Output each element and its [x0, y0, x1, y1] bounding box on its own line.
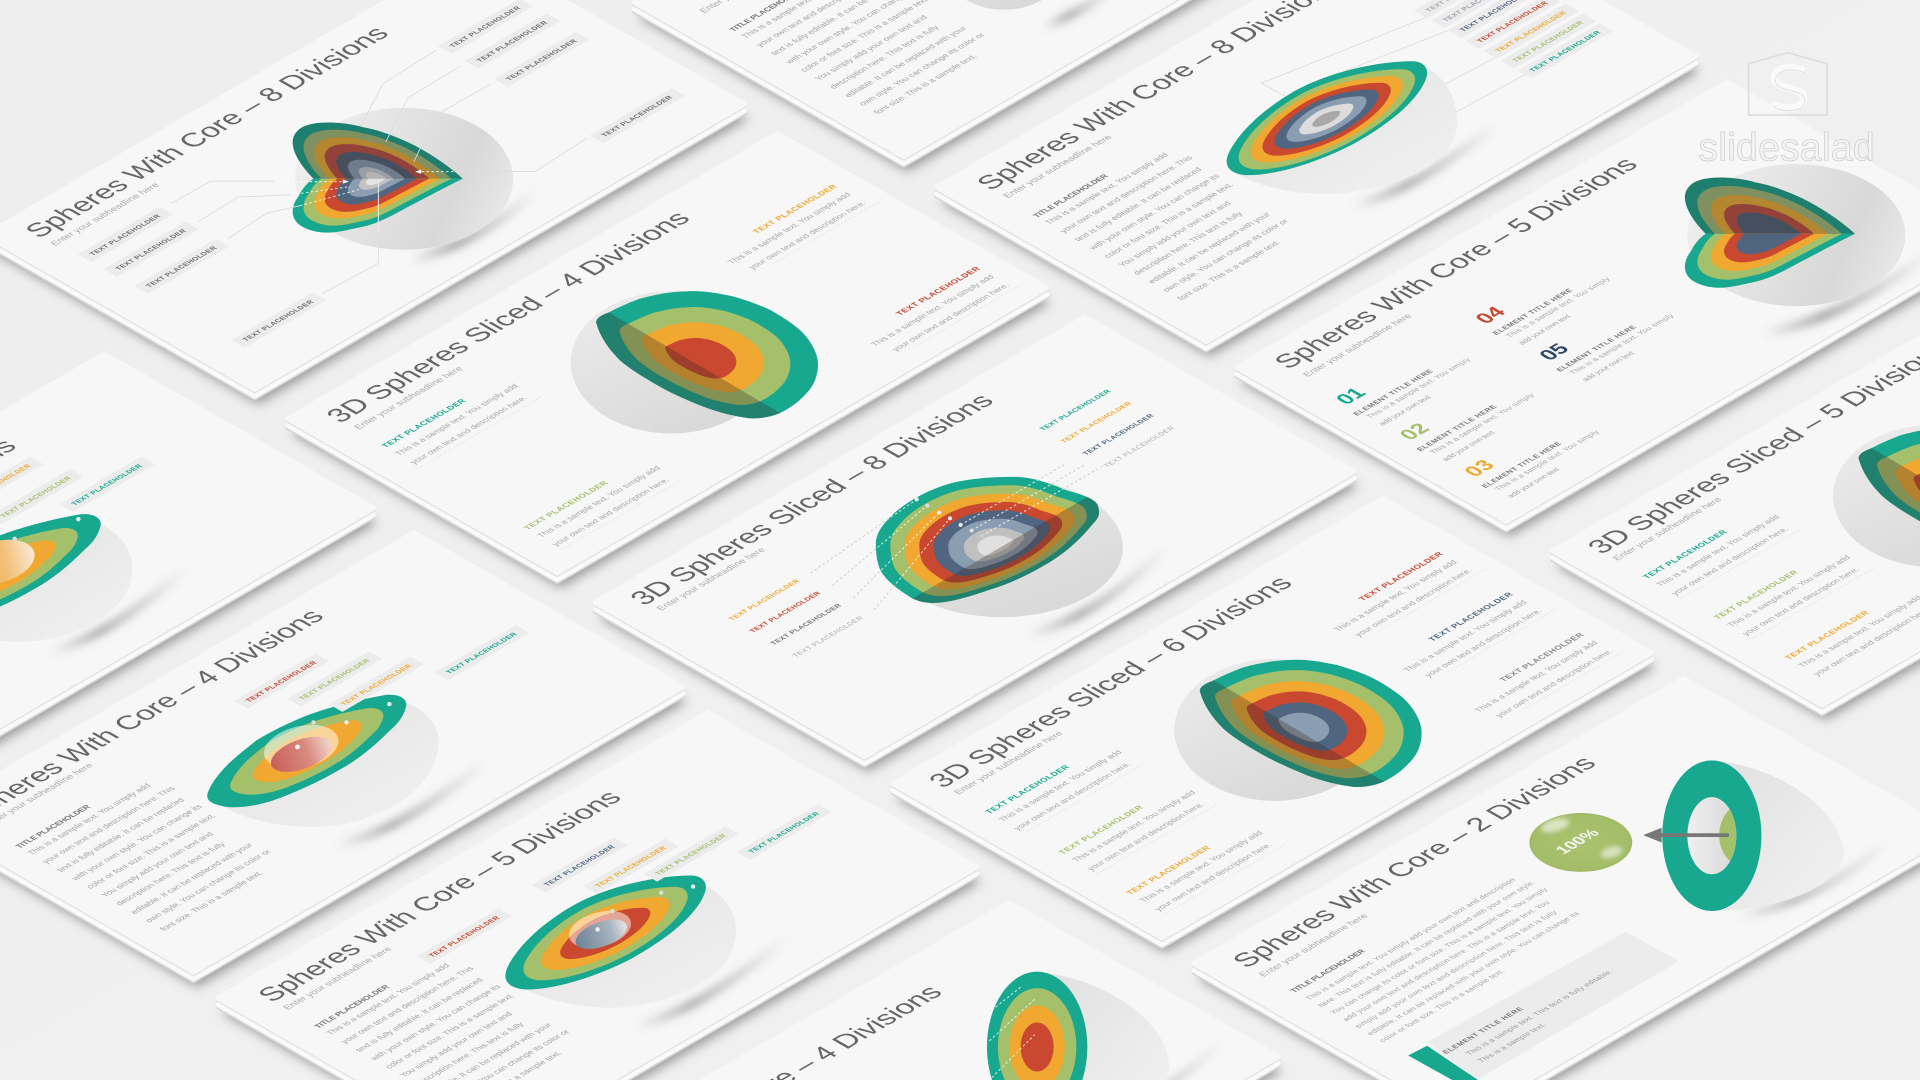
body text: text is fully editable. It can be replaced: [54, 796, 187, 873]
glass core: [565, 884, 695, 955]
subheading: Enter your subheadline here: [48, 181, 161, 247]
label: lime block: TEXT PLACEHOLDER: [1057, 804, 1145, 856]
title: Spheres With Core – 2 Divisions: [1225, 752, 1603, 972]
panel: spheres with core 2 divisions: [1192, 758, 1920, 1080]
half sphere: [507, 884, 736, 1008]
item 03: add your own text: [1505, 466, 1562, 499]
label: lime block: [1057, 780, 1219, 874]
body text: color or font size. This is a sample text.: [382, 992, 517, 1070]
disc rings: [0, 514, 101, 627]
disc rings with dark slice: [1200, 660, 1422, 787]
item 03: ELEMENT TITLE HERE: [1479, 440, 1564, 489]
glass core: [260, 702, 392, 779]
sphere shadow: [50, 566, 190, 651]
body text: your own text and description here. This: [39, 785, 177, 865]
item 04: 04: [1471, 304, 1511, 327]
item 03: 03: [1460, 457, 1500, 480]
sphere body: [1174, 659, 1375, 801]
labels: TEXT PLACEHOLDER: [1476, 1, 1550, 44]
panel: spheres with core 8 divisions, flat disc: [937, 0, 1700, 356]
label: red block: TEXT PLACEHOLDER: [894, 265, 982, 317]
labels: TEXT PLACEHOLDER: [476, 20, 550, 63]
subheading: Enter your subheadline here: [281, 945, 394, 1011]
half sphere shell: [1712, 760, 1844, 911]
disc rings with dark slice: [596, 291, 818, 418]
body text: editable. It can be replaced with your: [842, 24, 969, 99]
labels: TEXT PLACEHOLDER: [245, 661, 319, 703]
body text: TITLE PLACEHOLDER: [1288, 948, 1368, 994]
disc rings with dark slice: [876, 476, 1100, 603]
item 02: [1391, 373, 1549, 465]
item 03: This is a sample text. You simply: [1492, 429, 1601, 492]
label: navy block: This is a sample text. You simply add: [1401, 599, 1529, 673]
body text: with your own style. You can change its: [68, 803, 204, 882]
body text: add your own text and description here. This is a sample text. You: [1340, 899, 1552, 1023]
item 01: 01: [1331, 384, 1371, 408]
subheading: Enter your subheadline here: [1301, 312, 1414, 378]
labels: TEXT PLACEHOLDER: [1039, 389, 1113, 432]
body text: font size. This is a sample text.: [1175, 239, 1283, 302]
labels: TEXT PLACEHOLDER: [70, 464, 144, 507]
body text: This is a sample text. You simply add: [323, 962, 452, 1036]
subheading: Enter your subheadline here: [1001, 134, 1114, 199]
panel: bottom slide, 4 divisions: [519, 902, 1282, 1080]
item 04: add your own text: [1516, 313, 1573, 346]
sphere body: [295, 108, 513, 250]
labels: TEXT PLACEHOLDER: [1512, 20, 1585, 63]
element text: This is a sample text. This text is fully editable.: [1463, 968, 1615, 1056]
subheading: Enter your subheadline here: [952, 730, 1065, 796]
sphere shadow: [1353, 122, 1500, 206]
teal accent bar: [1408, 1046, 1478, 1080]
body text: with your own style. You can change its: [1086, 172, 1222, 252]
labels: TEXT PLACEHOLDER: [114, 229, 188, 272]
element text: This is a sample text.: [1476, 1022, 1548, 1064]
labels: TEXT PLACEHOLDER: [0, 476, 73, 519]
half sphere: [1229, 66, 1457, 194]
body text: This is a sample text. You simply add: [25, 782, 153, 856]
hole with core crescent: [1687, 797, 1736, 874]
label: grey block: TEXT PLACEHOLDER: [1498, 632, 1586, 683]
sphere shadow: [1739, 839, 1892, 916]
item 01: [1327, 338, 1485, 429]
label: red block: your own text and description here.: [889, 282, 1011, 353]
labels: TEXT PLACEHOLDER: [654, 834, 728, 876]
label: teal block: [983, 740, 1146, 834]
labels: TEXT PLACEHOLDER: [242, 300, 316, 343]
label: grey block: your own text and description here.: [1493, 648, 1615, 719]
label: lime block: your own text and description here.: [1740, 566, 1862, 637]
title: 3D Spheres Sliced – 8 Divisions: [623, 389, 1000, 609]
subheading: Enter your subheadline here: [1611, 496, 1724, 562]
arrow: [1643, 828, 1729, 842]
body text: [311, 950, 594, 1080]
panel: spheres with core 4 divisions: [0, 533, 687, 987]
label: red block: This is a sample text. You simply add: [1331, 558, 1459, 633]
label: red block: [855, 260, 1023, 358]
body text: You simply add your own text and: [98, 830, 216, 899]
label: orange block: [1124, 820, 1287, 915]
labels: TEXT PLACEHOLDER: [1060, 401, 1134, 444]
label: lime block: your own text and description here.: [1084, 801, 1207, 872]
label: teal block: This is a sample text. You simply add: [996, 748, 1124, 823]
label: red block: This is a sample text. You simply add: [868, 273, 997, 348]
title: Spheres With Core – 5 Divisions: [250, 786, 628, 1006]
label: orange block: your own text and description here.: [1152, 841, 1274, 912]
label: lime block: your own text and description here.: [549, 476, 671, 547]
label: grey block: This is a sample text. You simply add: [1472, 639, 1600, 714]
labels: [234, 625, 529, 712]
label: lime block: [1712, 545, 1874, 639]
body text: here. This text is fully editable. It can be replaced with your own style.: [1316, 879, 1538, 1008]
labels: TEXT PLACEHOLDER: [748, 811, 821, 854]
body text: text is fully editable. It can be replaced: [353, 976, 485, 1053]
body text: This is a sample text. You simply add your own text and description: [1303, 877, 1518, 1001]
body text: own style. You can change its color or: [1160, 217, 1291, 293]
sphere body: [571, 291, 771, 433]
label: teal block: [1641, 504, 1803, 599]
body text: This is a sample text. You simply add: [1042, 151, 1171, 226]
label: teal block: This is a sample text. You simply add: [392, 382, 521, 457]
labels: TEXT PLACEHOLDER: [770, 603, 843, 646]
label: lime block: TEXT PLACEHOLDER: [522, 480, 610, 531]
body text: You can change its color or font size. This is a sample text. You simply: [1328, 886, 1550, 1016]
labels: TEXT PLACEHOLDER: [1082, 414, 1156, 456]
body text: [727, 0, 1009, 116]
subheading: Enter your subheadline here: [654, 546, 768, 612]
body text: You simply add your own text and: [812, 13, 930, 82]
icon: shield with S: [1749, 53, 1827, 115]
labels: [417, 804, 832, 964]
item 02: This is a sample text. You simply: [1428, 392, 1536, 455]
sphere fragment: [937, 0, 1114, 27]
body text: font size. This is a sample text.: [871, 53, 979, 116]
sphere shadow: [1029, 545, 1169, 634]
half sphere: [0, 524, 132, 642]
item 02: ELEMENT TITLE HERE: [1415, 403, 1499, 453]
body text: description here. This text is fully: [827, 23, 942, 90]
core ball with 100%: [1529, 813, 1632, 872]
body text: color or font size. This is a sample text.: [1101, 181, 1236, 260]
logo watermark: [1698, 53, 1875, 169]
sphere shadow: [337, 759, 490, 845]
sphere body: [1687, 164, 1905, 306]
panel: 3D spheres sliced 6 divisions: [890, 552, 1658, 958]
title: 3D Spheres Sliced – 6 Divisions: [921, 572, 1299, 792]
core ball with 100%: 100%: [1552, 826, 1604, 857]
panel: spheres with core 5 divisions, flat disc: [218, 713, 981, 1080]
body text: [1288, 864, 1599, 1044]
labels: TEXT PLACEHOLDER: [445, 632, 519, 675]
disc rings: [1227, 61, 1427, 175]
label: lime block: This is a sample text. You simply add: [534, 464, 663, 539]
leader lines: [811, 464, 1102, 610]
body text: TITLE PLACEHOLDER: [14, 803, 93, 850]
labels: TEXT PLACEHOLDER: [543, 845, 617, 888]
label: orange block: This is a sample text. You simply add: [725, 191, 853, 266]
label: orange block: TEXT PLACEHOLDER: [1124, 845, 1213, 896]
body text: own style. You can change its color or: [856, 31, 987, 107]
label: teal block: This is a sample text. You simply add: [1654, 513, 1782, 588]
disc rings: [987, 972, 1087, 1080]
subheading: Enter your subheadline here: [1257, 912, 1370, 978]
title: Spheres With Core – 5 Divisions: [1267, 153, 1644, 373]
body text: text is fully editable. It can be replaced: [1072, 166, 1204, 243]
sphere shadow: [1763, 251, 1920, 333]
panel: spheres with core 8 divisions, heart: [0, 0, 748, 404]
item 05: add your own text: [1580, 349, 1637, 383]
labels: [0, 457, 155, 524]
sphere shadow: [410, 190, 539, 260]
label: lime block: This is a sample text. You simply add: [1725, 554, 1853, 628]
panel: left partial slide: [0, 354, 377, 808]
body text: your own text and description here. This: [338, 965, 476, 1045]
disc rings: [505, 876, 706, 989]
panel: 3D spheres sliced 5 divisions, right: [1550, 356, 1920, 725]
item 05: This is a sample text. You simply: [1567, 312, 1676, 376]
label: navy block: your own text and description here.: [1422, 607, 1544, 678]
subheading: Enter your subheadline here: [352, 365, 465, 431]
label: grey block: [1459, 627, 1627, 724]
label: navy block: TEXT PLACEHOLDER: [1427, 591, 1515, 643]
body text: description here. This text is fully: [113, 840, 228, 907]
item 02: add your own text: [1440, 429, 1498, 462]
label: teal block: TEXT PLACEHOLDER: [380, 398, 468, 449]
labels: TEXT PLACEHOLDER: [728, 579, 802, 622]
body text: your own text and description here. This: [1057, 154, 1195, 234]
item 04: [1467, 257, 1625, 348]
labels: TEXT PLACEHOLDER: [428, 916, 502, 959]
label: orange block: This is a sample text. You simply add: [1796, 594, 1920, 669]
panel: top centre slide: [634, 0, 1397, 171]
body text: editable. It can be replaced with your own style. You can change its: [1365, 910, 1582, 1037]
label: red block: [1318, 546, 1486, 643]
label: red block: TEXT PLACEHOLDER: [1357, 551, 1445, 602]
sphere body: [1833, 425, 1920, 567]
labels: TEXT PLACEHOLDER: [594, 846, 668, 889]
grey element panel: [1427, 932, 1679, 1080]
item 05: ELEMENT TITLE HERE: [1554, 324, 1638, 373]
element text: ELEMENT TITLE HERE: [1440, 1006, 1526, 1055]
panel: 3D spheres sliced 4 divisions: [288, 133, 1051, 588]
body text: simply add your own text and description here. This text is fully: [1352, 909, 1559, 1030]
item 01: This is a sample text. You simply: [1364, 356, 1473, 420]
item 03: [1456, 410, 1614, 502]
label: teal block: your own text and description here.: [1011, 761, 1133, 832]
body text: with your own style. You can change its: [367, 983, 503, 1062]
sphere body: [880, 478, 1123, 617]
wordmark: slidesalad: [1698, 126, 1875, 169]
body text: You simply add your own text and: [1116, 199, 1234, 268]
body text: editable. It can be replaced with your: [1145, 211, 1273, 285]
labels: TEXT PLACEHOLDER: [340, 664, 414, 707]
panel: spheres with core 5 divisions, heart and list: [1237, 82, 1920, 536]
label: red block: your own text and description here.: [1352, 567, 1474, 638]
teal shell ring: [1662, 760, 1761, 911]
body text: [13, 770, 295, 933]
half sphere shell: [1037, 972, 1169, 1080]
labels: [728, 389, 1177, 659]
label: orange block: TEXT PLACEHOLDER: [751, 183, 839, 235]
body text: font size. This is a sample text.: [157, 869, 265, 932]
panel: 3D spheres sliced 8 divisions: [592, 390, 1360, 776]
labels: TEXT PLACEHOLDER: [505, 39, 579, 82]
labels: TEXT PLACEHOLDER: [298, 658, 372, 701]
labels: TEXT PLACEHOLDER: [749, 591, 823, 634]
label: lime block: [522, 455, 684, 550]
item 05: 05: [1534, 340, 1575, 364]
leader lines: [1261, 15, 1527, 165]
label: orange block: [712, 178, 880, 276]
item 02: 02: [1395, 420, 1435, 443]
label: navy block: [1388, 586, 1556, 684]
disc rings: [207, 695, 406, 807]
sphere shadow: [637, 937, 790, 1026]
item 04: ELEMENT TITLE HERE: [1490, 287, 1575, 336]
heart cross-section: [1685, 178, 1855, 288]
item 01: add your own text: [1376, 394, 1434, 427]
body text: [1030, 139, 1312, 302]
body text: own style. You can change its color or: [142, 848, 273, 924]
body text: TITLE PLACEHOLDER: [1031, 173, 1111, 219]
label: lime block: TEXT PLACEHOLDER: [1712, 569, 1800, 621]
body text: description here. This text is fully: [1131, 209, 1246, 276]
labels: TEXT PLACEHOLDER: [601, 95, 674, 138]
label: teal block: [380, 373, 542, 468]
labels: TEXT PLACEHOLDER: [1103, 426, 1177, 469]
labels: TEXT PLACEHOLDER: [792, 616, 865, 659]
label: lime block: This is a sample text. You simply add: [1069, 789, 1198, 863]
title: Spheres With Core – 8 Divisions: [18, 22, 395, 242]
labels: [1414, 0, 1613, 78]
labels: TEXT PLACEHOLDER: [89, 214, 163, 257]
label: teal block: TEXT PLACEHOLDER: [983, 764, 1072, 815]
leader lines: [171, 50, 587, 294]
labels: TEXT PLACEHOLDER: [1494, 11, 1568, 54]
item 05: [1530, 294, 1689, 385]
labels: [78, 0, 685, 348]
sphere shadow: [1065, 1041, 1224, 1080]
heart cross-section: [293, 122, 463, 233]
label: teal block: TEXT PLACEHOLDER: [1641, 529, 1729, 580]
item 04: This is a sample text. You simply: [1503, 276, 1612, 339]
label: orange block: your own text and description here.: [746, 200, 868, 271]
title: 3D Spheres Sliced – 4 Divisions: [319, 207, 697, 427]
labels: TEXT PLACEHOLDER: [145, 246, 219, 289]
body text: color or font size. This is a sample text.: [84, 812, 218, 890]
half sphere: [208, 703, 438, 827]
label: teal block: your own text and description here.: [407, 394, 529, 465]
body text: TITLE PLACEHOLDER: [312, 983, 392, 1030]
labels: TEXT PLACEHOLDER: [449, 6, 523, 49]
label: teal block: your own text and description here.: [1669, 525, 1791, 596]
labels: TEXT PLACEHOLDER: [1529, 30, 1603, 73]
body text: You simply add your own text and: [397, 1010, 515, 1079]
label: orange block: TEXT PLACEHOLDER: [1783, 610, 1871, 661]
disc rings with dark slice: [1858, 430, 1920, 522]
label: orange block: This is a sample text. You simply add: [1137, 829, 1265, 904]
item 01: ELEMENT TITLE HERE: [1351, 368, 1435, 417]
body text: editable. It can be replaced with your: [128, 841, 255, 915]
body text: color or font size. This is a sample text.: [1377, 968, 1507, 1044]
